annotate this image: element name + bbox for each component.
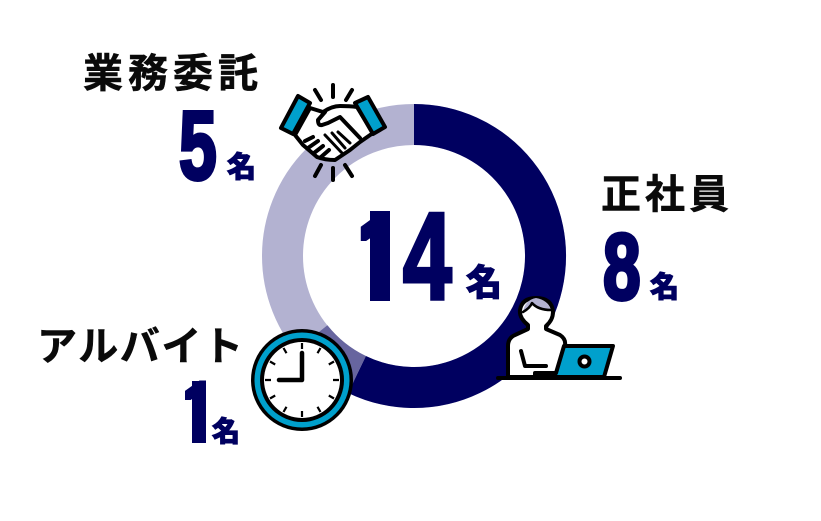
total: 14名: 4 [403, 187, 452, 326]
label: 正社員 8名 [601, 173, 733, 320]
total: 14名 [360, 211, 500, 301]
total: 14名: 名 [466, 262, 502, 303]
icon: clock [251, 329, 353, 431]
label: アルバイト 1名: 1 [181, 363, 225, 461]
label: アルバイト 1名: アルバイト [37, 325, 245, 369]
label: 正社員 8名: 名 [650, 271, 679, 304]
icon: person with laptop [498, 298, 620, 378]
icon: handshake [281, 85, 385, 180]
label: 正社員 8名: 正社員 [601, 173, 733, 217]
label: 業務委託 5名: 名 [227, 151, 256, 184]
donut chart [282, 124, 546, 388]
label: アルバイト 1名: 名 [212, 416, 240, 447]
label: 業務委託 5名 [83, 52, 263, 200]
label: 業務委託 5名: 5 [179, 91, 217, 200]
label: 業務委託 5名: 業務委託 [83, 52, 263, 96]
label: アルバイト 1名 [41, 326, 238, 445]
total: 14名: 1 [355, 188, 417, 325]
label: 正社員 8名: 8 [603, 215, 641, 320]
